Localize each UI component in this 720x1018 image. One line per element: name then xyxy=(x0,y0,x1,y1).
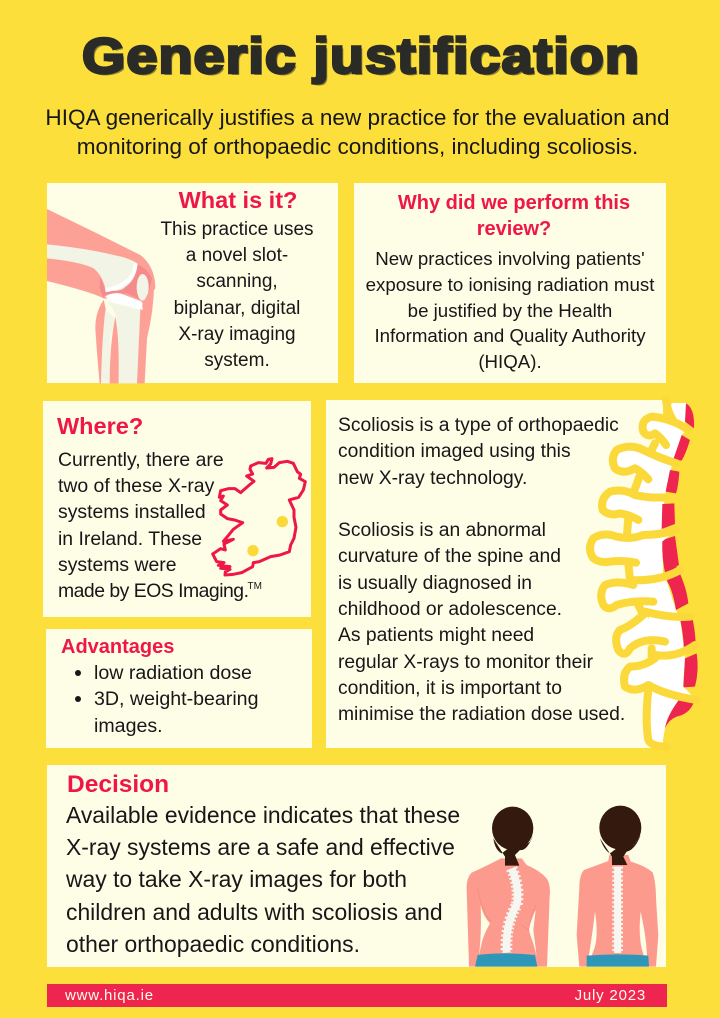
body text: scanning, xyxy=(196,271,278,292)
body text: two of these X-ray xyxy=(58,475,214,497)
body text: X-ray imaging xyxy=(178,324,296,345)
heading xyxy=(398,192,630,240)
body text: (HIQA). xyxy=(478,351,542,372)
body text: Scoliosis is a type of orthopaedic xyxy=(338,415,619,436)
subtitle: monitoring of orthopaedic conditions, including scoliosis. xyxy=(77,134,638,159)
panel: advantages xyxy=(46,629,312,748)
footer bar xyxy=(47,984,667,1007)
body text: As patients might need xyxy=(338,625,534,646)
body text: made by EOS Imaging.TM xyxy=(58,580,262,602)
body text: a novel slot- xyxy=(186,245,288,266)
body text: is usually diagnosed in xyxy=(338,573,532,594)
body text: childhood or adolescence. xyxy=(338,599,562,620)
subtitle: HIQA generically justifies a new practice for the evaluation and xyxy=(45,105,670,130)
heading: Decision xyxy=(67,771,169,798)
body text xyxy=(366,248,654,372)
body text: curvature of the spine and xyxy=(338,546,561,567)
body text: biplanar, digital xyxy=(174,298,300,319)
body text: systems were xyxy=(58,554,177,576)
body text: condition imaged using this xyxy=(338,441,571,462)
subtitle xyxy=(45,105,670,159)
body text: way to take X-ray images for both xyxy=(66,866,407,892)
bullet list xyxy=(75,662,258,737)
body text: X-ray systems are a safe and effective xyxy=(66,834,455,860)
bullet list: 3D, weight-bearing xyxy=(94,688,258,710)
body text: New practices involving patients' xyxy=(375,248,645,269)
body text: systems installed xyxy=(58,501,206,523)
body text: children and adults with scoliosis and xyxy=(66,899,443,925)
heading: Advantages xyxy=(61,636,174,658)
heading: What is it? xyxy=(179,187,297,213)
bullet list: images. xyxy=(94,715,163,737)
panel: why did we perform this review xyxy=(354,183,666,383)
body text: other orthopaedic conditions. xyxy=(66,931,360,957)
heading: review? xyxy=(477,218,551,240)
body text: new X-ray technology. xyxy=(338,468,527,489)
bullet list: low radiation dose xyxy=(94,662,252,684)
panel: scoliosis xyxy=(326,400,663,748)
footer website: www.hiqa.ie xyxy=(65,987,154,1004)
body text: be justified by the Health xyxy=(408,300,612,321)
figure: straight spine xyxy=(577,806,658,967)
panel: decision xyxy=(47,765,666,967)
body text: regular X-rays to monitor their xyxy=(338,652,593,673)
body text: Currently, there are xyxy=(58,449,224,471)
body text: system. xyxy=(204,350,270,371)
panel: where xyxy=(43,401,311,617)
footer date: July 2023 xyxy=(575,987,646,1004)
body text: Scoliosis is an abnormal xyxy=(338,520,546,541)
body text: Information and Quality Authority xyxy=(374,325,646,346)
body text: in Ireland. These xyxy=(58,528,202,550)
body text: This practice uses xyxy=(160,219,314,240)
body text xyxy=(338,415,625,725)
heading: Why did we perform this xyxy=(398,192,630,214)
body text: exposure to ionising radiation must xyxy=(366,274,654,295)
body text: Available evidence indicates that these xyxy=(66,802,460,828)
panel: what is it xyxy=(47,183,338,383)
body text xyxy=(66,802,460,957)
body text xyxy=(58,449,262,602)
heading: Where? xyxy=(57,413,143,439)
body text: minimise the radiation dose used. xyxy=(338,704,625,725)
body text: condition, it is important to xyxy=(338,678,562,699)
body text xyxy=(160,219,314,371)
title: Generic justification xyxy=(82,28,640,84)
figure: curved spine xyxy=(467,807,550,967)
